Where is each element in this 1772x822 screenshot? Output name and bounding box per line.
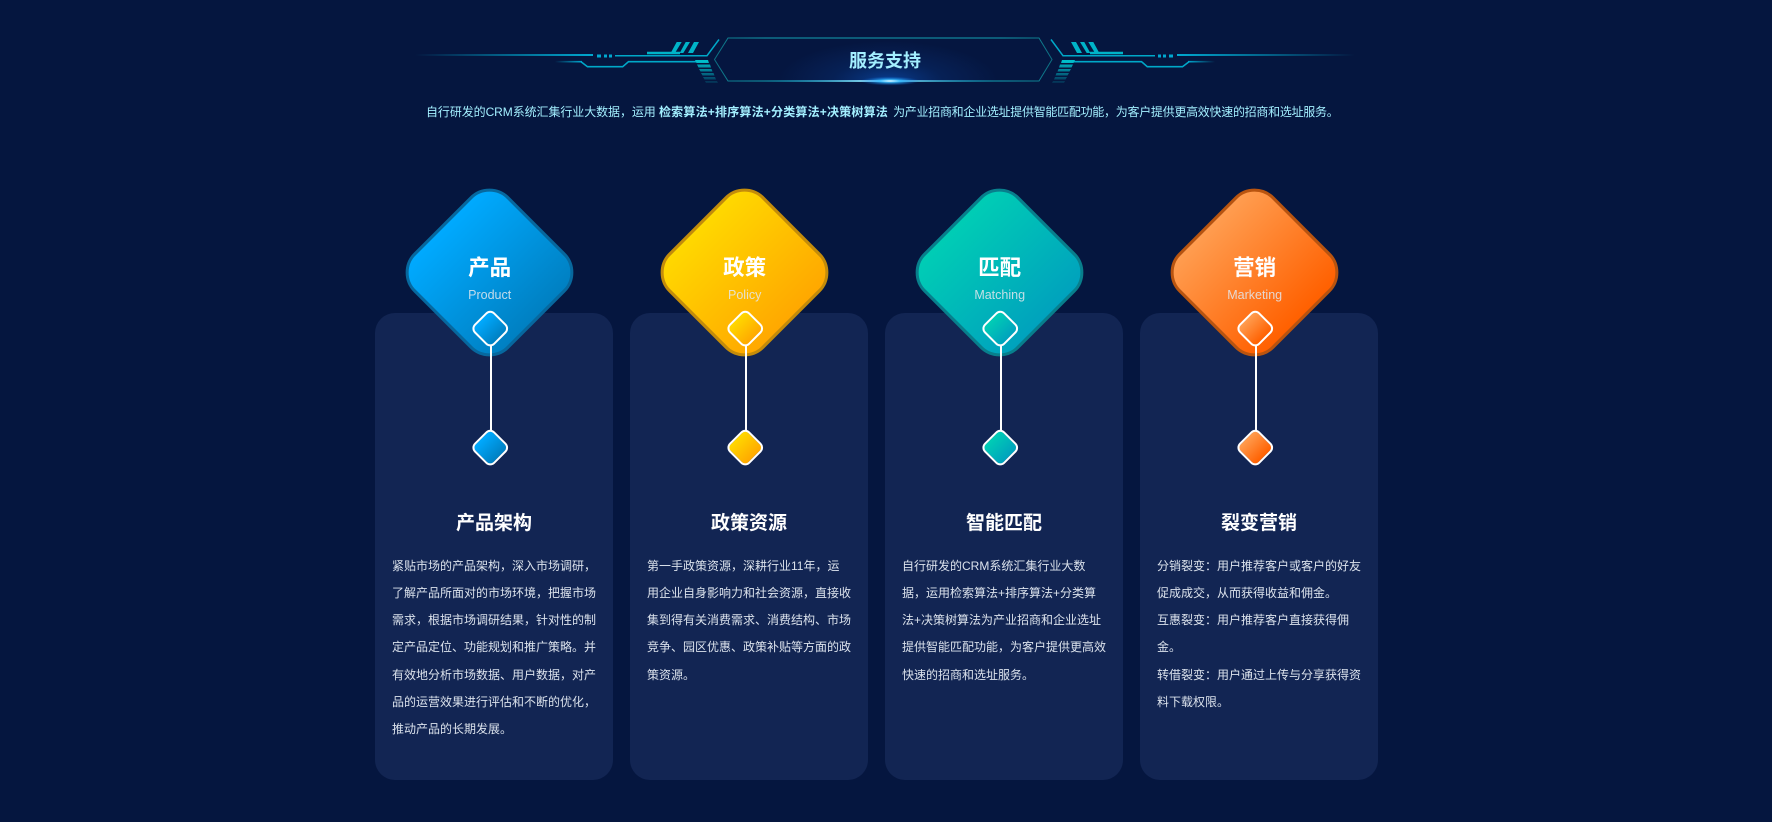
connector line xyxy=(490,345,492,431)
connector top node xyxy=(1235,309,1276,349)
text: 政策资源 description: 第一手政策资源，深耕行业11年，运 xyxy=(647,559,839,573)
diamond sublabel: Product: Product xyxy=(468,288,511,302)
text: 智能匹配 description: 法+决策树算法为产业招商和企业选址 xyxy=(902,613,1101,627)
diamond label: 政策: 政策 xyxy=(723,256,766,280)
icon: matching diamond xyxy=(904,177,1095,367)
left ornament xyxy=(415,40,719,83)
text: 智能匹配 description: 自行研发的CRM系统汇集行业大数 xyxy=(902,559,1085,573)
text: 裂变营销 description: 金。 xyxy=(1157,640,1181,654)
diamond label: 匹配: 匹配 xyxy=(978,256,1021,280)
text: 智能匹配 description xyxy=(902,559,1106,682)
text: 裂变营销 description xyxy=(1157,559,1361,709)
diamond sublabel: Marketing: Marketing xyxy=(1227,288,1282,302)
subtitle: 自行研发的CRM系统汇集行业大数据，运用 检索算法+排序算法+分类算法+决策树算法 为产业招商和企业选址提供智能匹配功能，为客户提供更高效快速的招商和选址服务。 xyxy=(426,105,1338,119)
text: 产品架构 description: 有效地分析市场数据、用户数据，对产 xyxy=(392,668,596,682)
header decoration xyxy=(424,38,1346,86)
connector top node xyxy=(980,309,1021,349)
text: 裂变营销 description: 互惠裂变：用户推荐客户直接获得佣 xyxy=(1157,613,1349,627)
text: 政策资源 description: 集到得有关消费需求、消费结构、市场 xyxy=(647,613,851,627)
connector line xyxy=(1000,345,1002,431)
text: 裂变营销 description: 转借裂变：用户通过上传与分享获得资 xyxy=(1157,668,1361,682)
heading: 智能匹配: 智能匹配 xyxy=(966,513,1042,534)
panel: 政策资源 xyxy=(630,188,868,780)
connector bottom node xyxy=(980,428,1021,468)
text: 裂变营销 description: 促成成交，从而获得收益和佣金。 xyxy=(1157,586,1337,600)
text: 政策资源 description: 策资源。 xyxy=(647,668,695,682)
text: 智能匹配 description: 据，运用检索算法+排序算法+分类算 xyxy=(902,586,1096,600)
connector top node xyxy=(470,309,511,349)
diamond label: 产品: 产品 xyxy=(468,256,511,280)
text: 产品架构 description: 紧贴市场的产品架构，深入市场调研， xyxy=(392,559,596,573)
text: 产品架构 description: 品的运营效果进行评估和不断的优化， xyxy=(392,695,596,709)
diamond sublabel: Policy: Policy xyxy=(728,288,761,302)
text: 政策资源 description: 用企业自身影响力和社会资源，直接收 xyxy=(647,586,851,600)
connector line xyxy=(1255,345,1257,431)
icon: marketing diamond xyxy=(1159,177,1350,367)
title frame xyxy=(714,38,1052,86)
text: 智能匹配 description: 提供智能匹配功能，为客户提供更高效 xyxy=(902,640,1106,654)
panel: 裂变营销 xyxy=(1140,188,1378,780)
text: 产品架构 description: 了解产品所面对的市场环境，把握市场 xyxy=(392,586,596,600)
diamond label: 营销: 营销 xyxy=(1233,256,1276,280)
text: 产品架构 description: 定产品定位、功能规划和推广策略。并 xyxy=(392,640,596,654)
icon: product diamond xyxy=(394,177,585,367)
text: 产品架构 description: 需求，根据市场调研结果，针对性的制 xyxy=(392,613,596,627)
diamond sublabel: Matching: Matching xyxy=(974,288,1025,302)
text: 产品架构 description xyxy=(392,559,596,736)
text: 政策资源 description xyxy=(647,559,851,682)
heading: 产品架构: 产品架构 xyxy=(456,513,532,534)
connector top node xyxy=(725,309,766,349)
connector line xyxy=(745,345,747,431)
panel: 产品架构 xyxy=(375,188,613,780)
text: 产品架构 description: 推动产品的长期发展。 xyxy=(392,722,512,736)
heading: 政策资源: 政策资源 xyxy=(711,513,787,534)
connector bottom node xyxy=(725,428,766,468)
icon: policy diamond xyxy=(649,177,840,367)
text: 智能匹配 description: 快速的招商和选址服务。 xyxy=(902,668,1034,682)
heading: 裂变营销: 裂变营销 xyxy=(1221,513,1297,534)
text: 裂变营销 description: 料下载权限。 xyxy=(1157,695,1229,709)
title: 服务支持 xyxy=(849,51,921,71)
connector bottom node xyxy=(470,428,511,468)
text: 政策资源 description: 竞争、园区优惠、政策补贴等方面的政 xyxy=(647,640,851,654)
connector bottom node xyxy=(1235,428,1276,468)
text: 裂变营销 description: 分销裂变：用户推荐客户或客户的好友 xyxy=(1157,559,1361,573)
right ornament xyxy=(1051,40,1355,83)
panel: 智能匹配 xyxy=(885,188,1123,780)
